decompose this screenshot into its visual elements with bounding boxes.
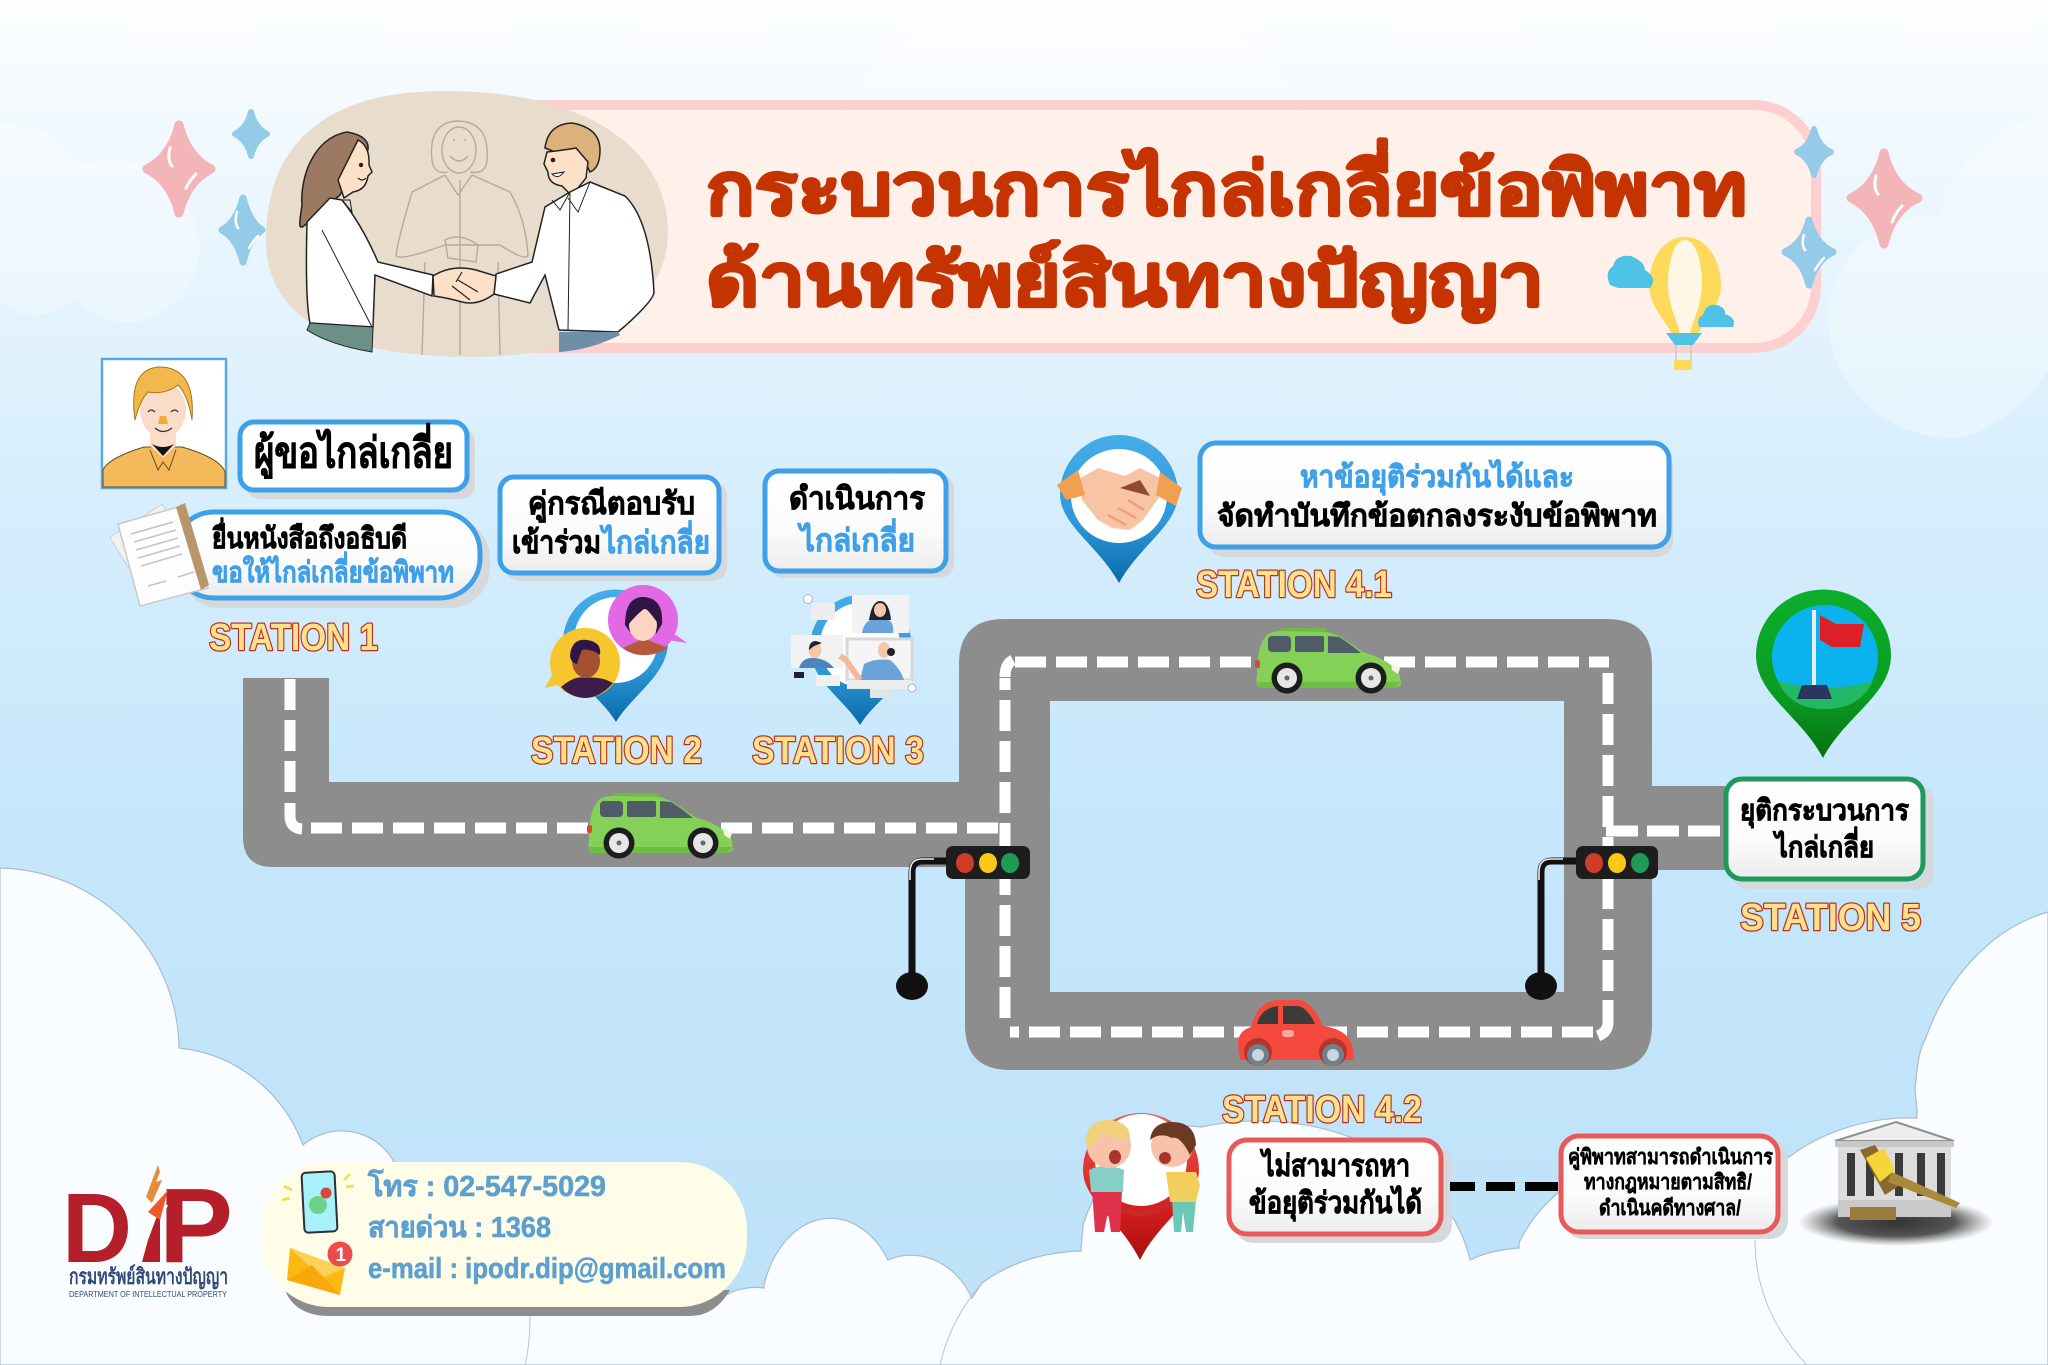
station 1 label: STATION 1 <box>209 617 378 659</box>
bubble woman <box>608 585 687 655</box>
box: legal action: ดำเนินคดีทางศาล/ <box>1599 1196 1741 1220</box>
pin: station 2 <box>545 585 687 722</box>
dashed connector <box>1450 1182 1558 1191</box>
contact text: โทร : 02-547-5029 <box>367 1168 606 1203</box>
box: legal action: คู่พิพาทสามารถดำเนินการ <box>1568 1146 1774 1171</box>
box: station 3: ดำเนินการ <box>789 481 925 516</box>
pin: station 4.2 arguing kids <box>1083 1113 1200 1260</box>
hands <box>1057 468 1182 530</box>
station 1 pill: ยื่นหนังสือถึงอธิบดี <box>212 517 407 555</box>
icon: email: 1 <box>336 1245 346 1266</box>
box: station 2: เข้าร่วม <box>512 525 601 560</box>
contact text: e-mail : ipodr.dip@gmail.com <box>368 1253 726 1285</box>
pin: station 4.1 handshake <box>1057 435 1182 583</box>
car: green, upper road <box>1255 628 1401 694</box>
car: red, bottom road <box>1238 1000 1354 1066</box>
man <box>433 123 654 352</box>
box: station 5: ไกล่เกลี่ย <box>1772 826 1874 864</box>
illustration: handshake with mediator <box>266 91 668 357</box>
station 2 label: STATION 2 <box>531 730 702 772</box>
label: applicant: ผู้ขอไกล่เกลี่ย <box>254 423 453 479</box>
box: station 4.1: หาข้อยุติร่วมกันได้และ <box>1300 459 1574 496</box>
title banner <box>420 105 1816 348</box>
label: applicant <box>240 422 475 499</box>
box: legal action <box>1561 1136 1788 1239</box>
box: station 2: ไกล่เกลี่ย <box>599 520 710 560</box>
box: station 5: ยุติกระบวนการ <box>1740 795 1909 828</box>
car: green, lower road <box>587 793 733 858</box>
box: legal action: ทางกฎหมายตามสิทธิ/ <box>1584 1171 1752 1194</box>
white clouds at the bottom <box>0 868 2048 1365</box>
road <box>243 619 1740 1070</box>
bubble man <box>545 628 620 698</box>
logo: DIP: P <box>159 1167 233 1285</box>
pin: station 5 flag <box>1756 590 1891 758</box>
station 1 pill <box>174 512 490 608</box>
icon: phone <box>282 1171 354 1233</box>
contact text: สายด่วน : 1368 <box>368 1212 551 1244</box>
station 5 label: STATION 5 <box>1740 897 1921 939</box>
title text: กระบวนการไกล่เกลี่ยข้อพิพาท <box>706 138 1747 230</box>
box: station 3 <box>765 471 954 578</box>
ghost mediator <box>396 121 528 355</box>
kid right <box>1150 1122 1200 1232</box>
pin: station 3 with video call screens <box>791 594 916 725</box>
portrait: applicant <box>102 359 226 488</box>
icon: hot air balloon <box>1608 237 1734 370</box>
box: cannot reach agreement: ไม่สามารถหา <box>1259 1148 1410 1183</box>
box: station 5 <box>1726 779 1934 889</box>
department name: กรมทรัพย์สินทางปัญญา <box>69 1264 228 1290</box>
box: station 2: คู่กรณีตอบรับ <box>528 486 695 523</box>
icon: court and gavel <box>1798 1122 1994 1246</box>
contact text <box>367 1168 726 1285</box>
box: station 3: ไกล่เกลี่ย <box>797 518 915 558</box>
soft upper clouds <box>0 7 2048 438</box>
woman <box>300 132 433 352</box>
box: station 4.1: จัดทำบันทึกข้อตกลงระงับข้อพิพาท <box>1217 500 1657 533</box>
station 4.2 label: STATION 4.2 <box>1222 1089 1422 1131</box>
logo: DIP: D <box>62 1173 132 1283</box>
kid left <box>1085 1120 1131 1232</box>
icon: documents <box>110 503 209 606</box>
icon: email <box>287 1242 352 1295</box>
title text: ด้านทรัพย์สินทางปัญญา <box>706 240 1544 323</box>
station 4.1 label: STATION 4.1 <box>1196 564 1392 606</box>
box: cannot reach agreement <box>1229 1140 1452 1243</box>
sparkles <box>147 112 1918 262</box>
department english: DEPARTMENT OF INTELLECTUAL PROPERTY <box>69 1289 227 1299</box>
traffic light: right <box>1525 846 1658 1000</box>
right blue sparkles <box>1785 129 1833 285</box>
box: station 2 <box>500 477 727 581</box>
logo: DIP <box>62 1165 233 1299</box>
contact panel <box>261 1162 747 1316</box>
station 1 pill: ขอให้ไกล่เกลี่ยข้อพิพาท <box>212 551 454 589</box>
box: cannot reach agreement: ข้อยุติร่วมกันได้ <box>1249 1185 1422 1222</box>
title text <box>706 138 1747 323</box>
box: station 4.1 <box>1200 443 1673 557</box>
traffic light: left <box>896 846 1030 1000</box>
station 3 label: STATION 3 <box>752 730 924 772</box>
